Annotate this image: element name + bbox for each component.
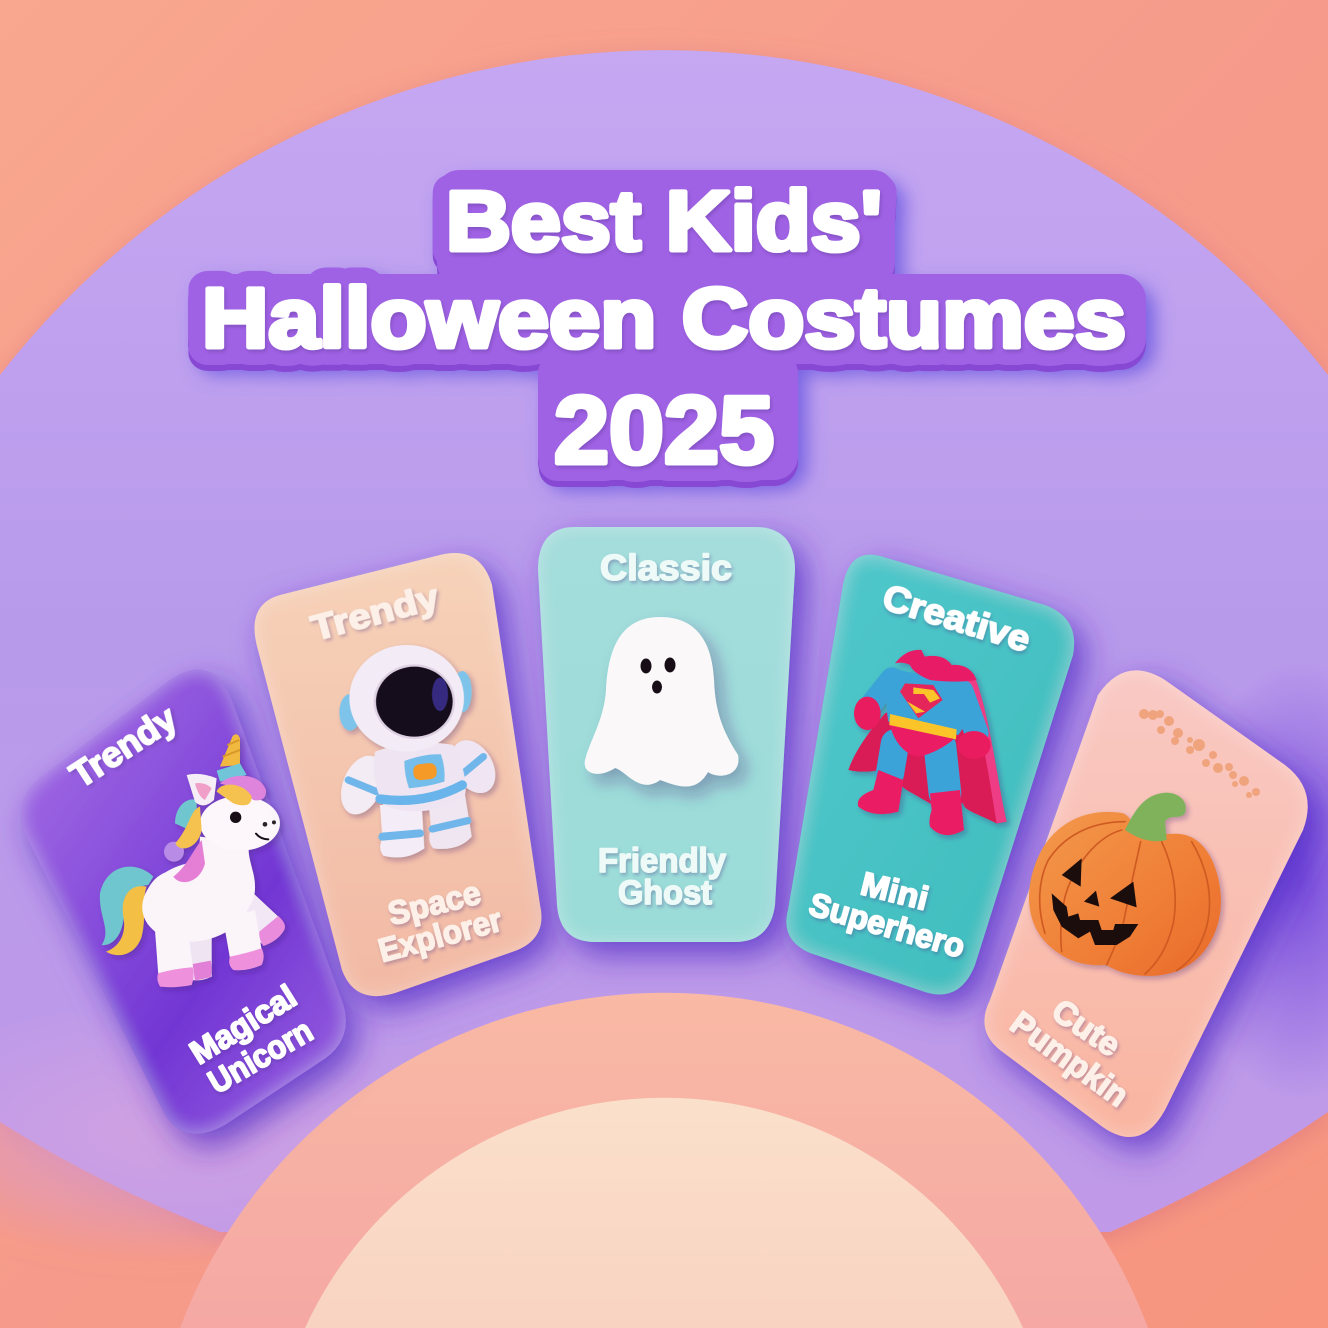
icon: superhero — [848, 650, 1007, 835]
panel: inner cream arc — [305, 1098, 1023, 1328]
label: mini superhero: Mini — [857, 865, 932, 917]
title — [188, 170, 1146, 484]
card: friendly ghost — [538, 527, 795, 942]
label: trendy: Trendy — [307, 577, 443, 649]
icon: unicorn — [100, 734, 285, 987]
label: mini superhero: Superhero — [805, 885, 969, 965]
title: Halloween Costumes — [202, 271, 1126, 365]
title: Best Kids' — [446, 174, 882, 268]
label: classic: Classic — [600, 547, 732, 588]
title: 2025 — [554, 377, 774, 484]
card: space explorer — [254, 553, 541, 996]
title: 2025 — [554, 377, 774, 484]
icon: ghost — [585, 617, 738, 787]
icon: pumpkin — [1029, 793, 1221, 976]
label: friendly ghost — [598, 842, 726, 912]
label: space explorer: Space — [384, 874, 484, 932]
label: friendly ghost: Ghost — [618, 874, 712, 912]
label: cute pumpkin: Pumpkin — [1004, 1004, 1136, 1114]
label: friendly ghost: Friendly — [598, 842, 726, 880]
title: Halloween Costumes — [202, 271, 1126, 365]
card: mini superhero — [786, 555, 1074, 994]
label: magical unicorn: Magical — [183, 977, 303, 1071]
label: illegible orange scribble — [1139, 709, 1260, 798]
label: creative: Creative — [878, 576, 1035, 660]
label: magical unicorn — [183, 977, 319, 1101]
label: space explorer: Explorer — [374, 901, 506, 969]
label: cute pumpkin: Cute — [1045, 991, 1127, 1063]
icon: astronaut — [333, 645, 504, 858]
title: Best Kids' — [446, 174, 882, 268]
panel: inner pink arc — [180, 993, 1148, 1328]
card: magical unicorn — [20, 670, 346, 1134]
label: trendy: Trendy — [63, 697, 184, 796]
label: magical unicorn: Unicorn — [202, 1012, 319, 1101]
card: cute pumpkin — [984, 670, 1308, 1137]
